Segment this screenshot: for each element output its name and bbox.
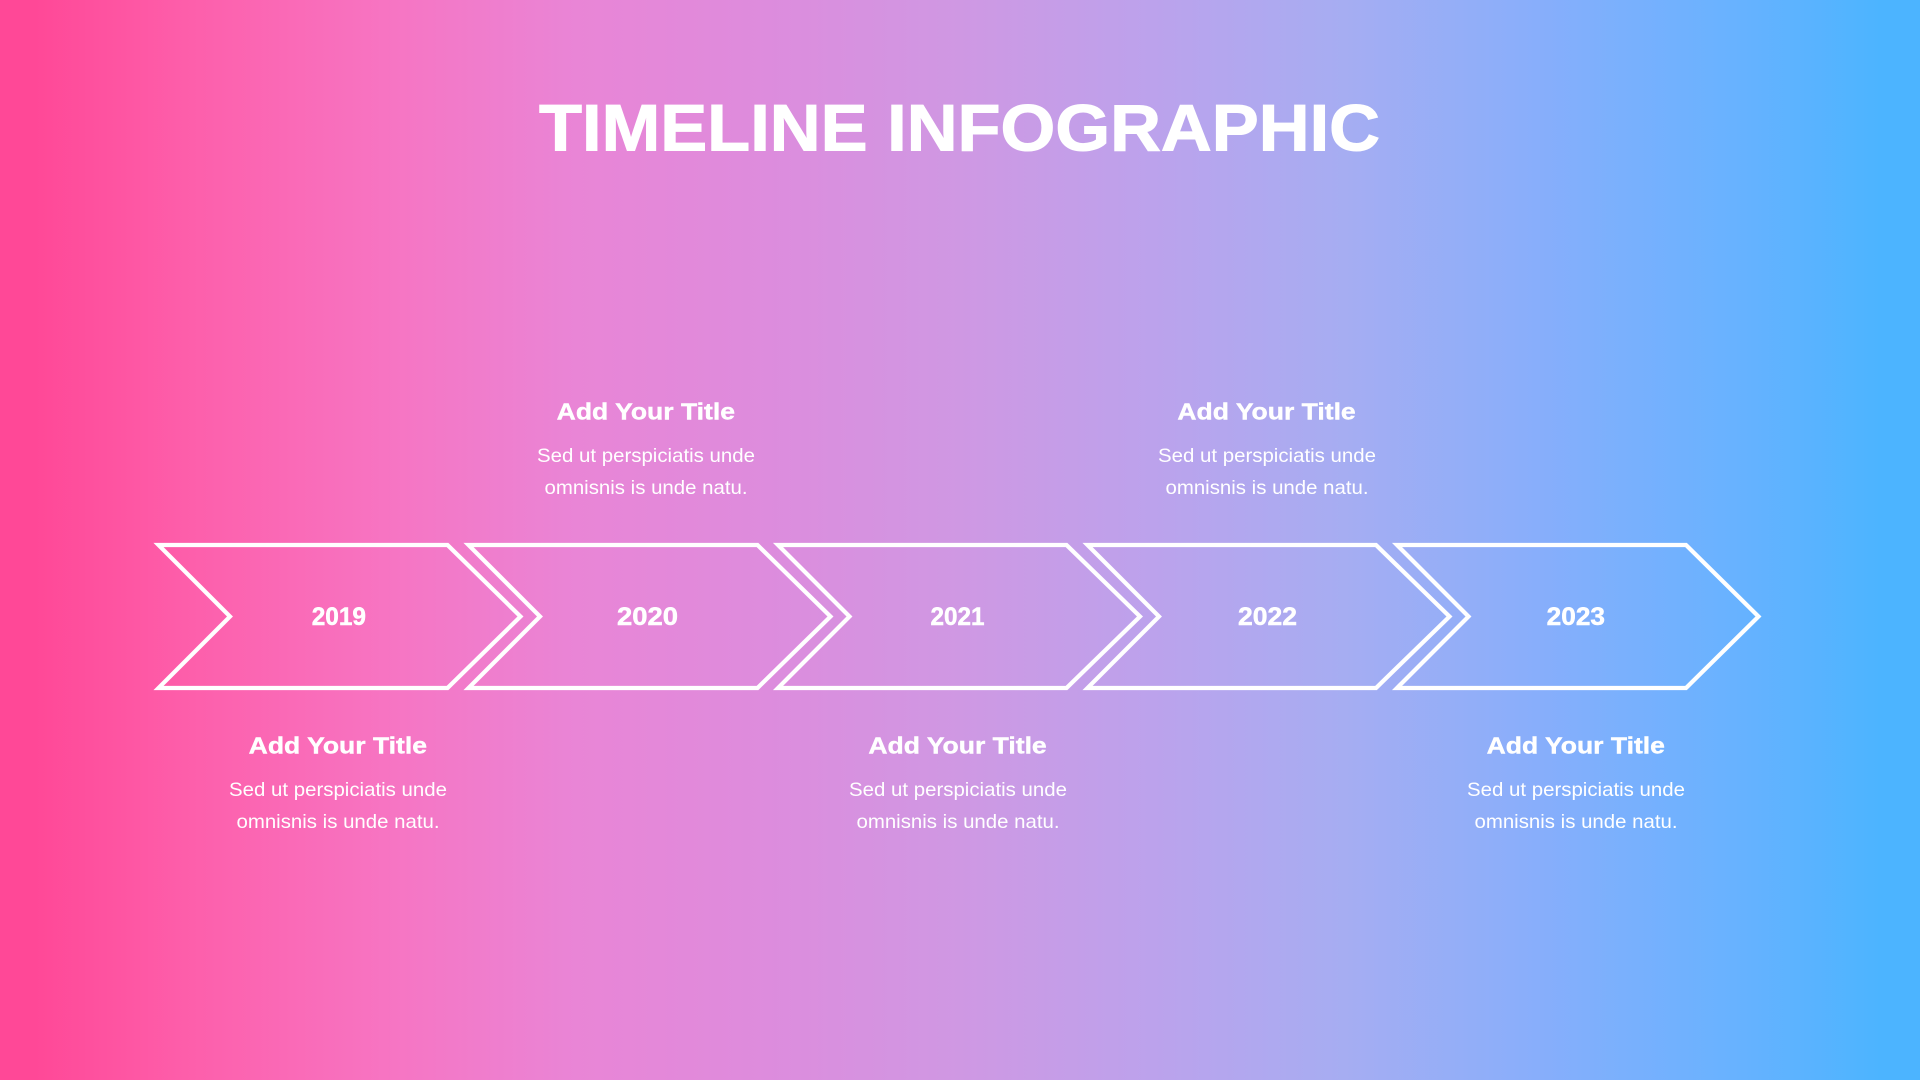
text block: 2021 (849, 732, 1067, 833)
arrow: 2023: 2023 (1547, 603, 1605, 631)
title: TIMELINE INFOGRAPHIC (539, 92, 1380, 164)
text block: 2021: omnisnis is unde natu. (856, 811, 1060, 833)
text block: 2020: Add Your Title (557, 398, 735, 424)
text block: 2022: omnisnis is unde natu. (1166, 477, 1368, 499)
text block: 2023 (1467, 732, 1685, 833)
text block: 2019 (229, 732, 447, 833)
text block: 2022 (1158, 398, 1376, 499)
text block: 2020 (537, 398, 755, 499)
arrow: 2019 (158, 545, 520, 688)
arrow: 2020: 2020 (617, 603, 678, 631)
text block: 2023: Sed ut perspiciatis unde (1467, 779, 1685, 801)
text block: 2023: omnisnis is unde natu. (1474, 811, 1678, 833)
arrow: 2020 (468, 545, 830, 688)
text block: 2021: Sed ut perspiciatis unde (849, 779, 1067, 801)
text block: 2019: Sed ut perspiciatis unde (229, 779, 447, 801)
text block: 2021: Add Your Title (868, 732, 1047, 758)
arrow: 2021 (778, 545, 1140, 688)
arrow: 2023 (1397, 545, 1758, 688)
timeline arrows (158, 545, 1758, 688)
text block: 2020: Sed ut perspiciatis unde (537, 445, 755, 467)
text block: 2023: Add Your Title (1487, 732, 1665, 758)
text block: 2022: Sed ut perspiciatis unde (1158, 445, 1376, 467)
text block: 2019: Add Your Title (249, 732, 427, 758)
text block: 2020: omnisnis is unde natu. (544, 477, 748, 499)
arrow: 2022 (1088, 545, 1450, 688)
text block: 2019: omnisnis is unde natu. (236, 811, 440, 833)
text block: 2022: Add Your Title (1177, 398, 1356, 424)
arrow: 2019: 2019 (312, 603, 366, 631)
arrow: 2021: 2021 (930, 603, 985, 631)
arrow: 2022: 2022 (1238, 603, 1297, 631)
